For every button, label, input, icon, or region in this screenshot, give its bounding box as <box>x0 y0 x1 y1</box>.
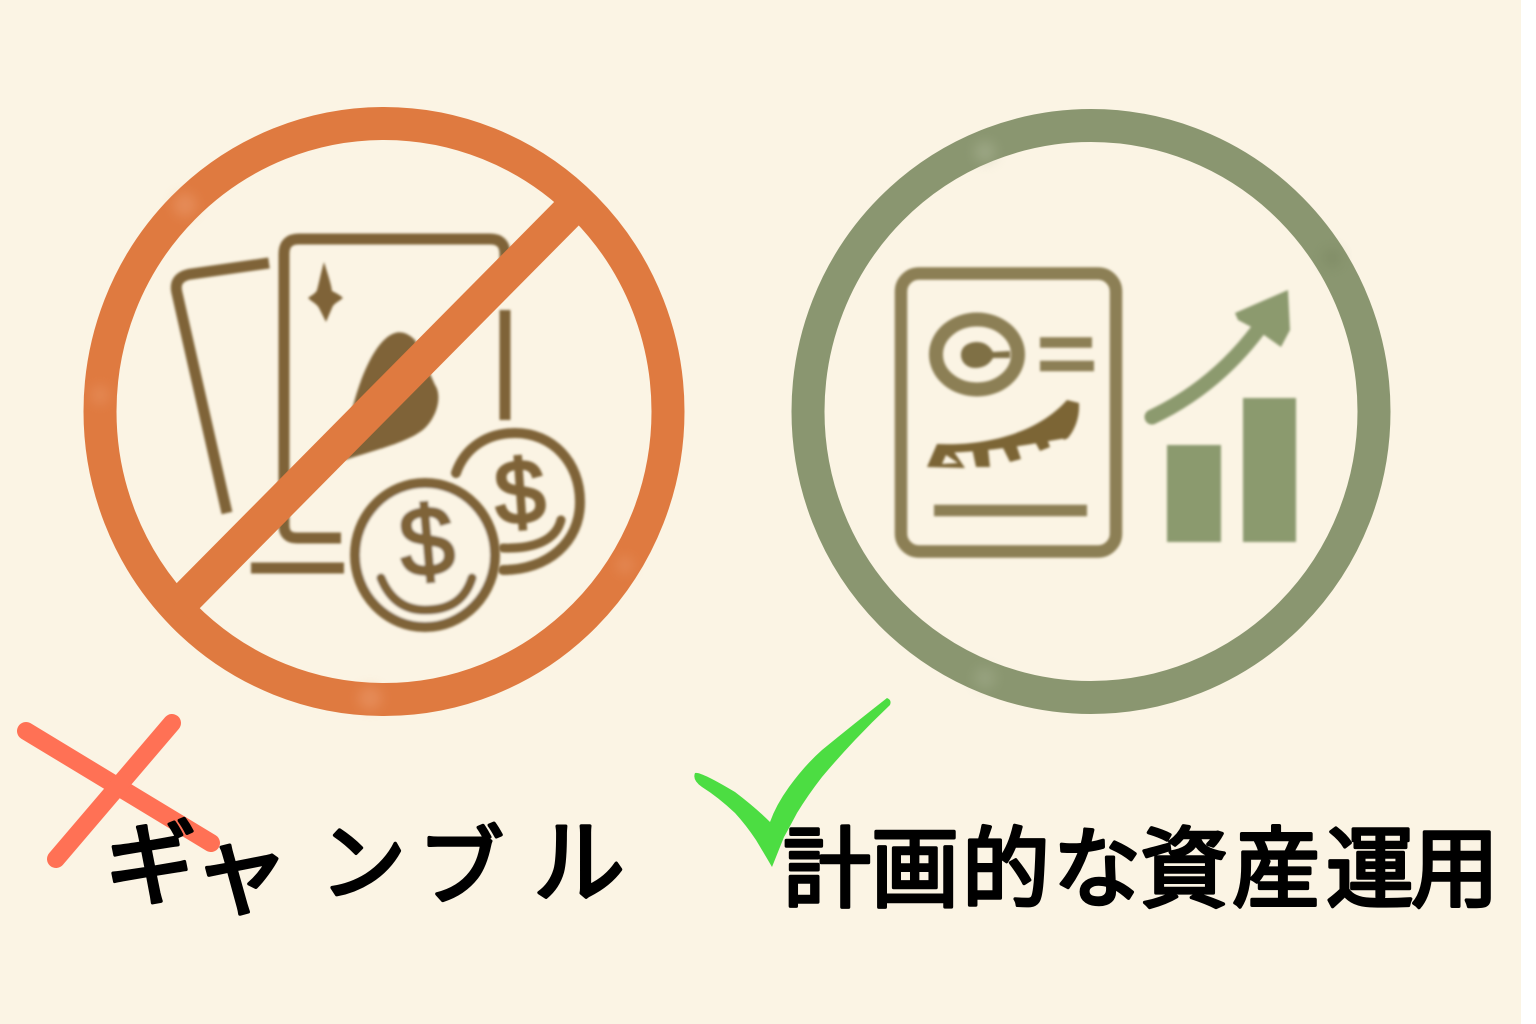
heading: gambling label: ル <box>533 813 625 915</box>
icon: back dollar coin <box>456 433 580 570</box>
icon: front playing card <box>251 239 505 568</box>
heading: gambling label: ン <box>320 816 406 912</box>
heading: planned asset management label: 計画的な資産運用 <box>783 820 1499 919</box>
heading: gambling label: ブ <box>418 820 504 916</box>
heading: gambling label: ギ <box>105 815 197 917</box>
heading: gambling label <box>105 813 625 926</box>
panel: gambling prohibition icon <box>90 124 668 710</box>
icon: back playing card <box>176 263 269 513</box>
bar chart: two rising bars <box>1167 398 1296 542</box>
icon: rising trend arrow <box>1152 290 1290 417</box>
icon: red cross mark <box>26 723 211 859</box>
panel: planned investing icon <box>808 126 1374 698</box>
icon: green check mark <box>694 698 891 867</box>
icon: front dollar coin <box>355 483 495 627</box>
icon: back dollar coin: $ <box>491 441 548 545</box>
icon: financial document <box>901 274 1116 552</box>
heading: gambling label: ャ <box>192 816 290 926</box>
icon: front dollar coin: $ <box>395 484 459 598</box>
icon: olive ring <box>808 126 1374 698</box>
icon: orange prohibition ring and slash <box>90 124 668 710</box>
